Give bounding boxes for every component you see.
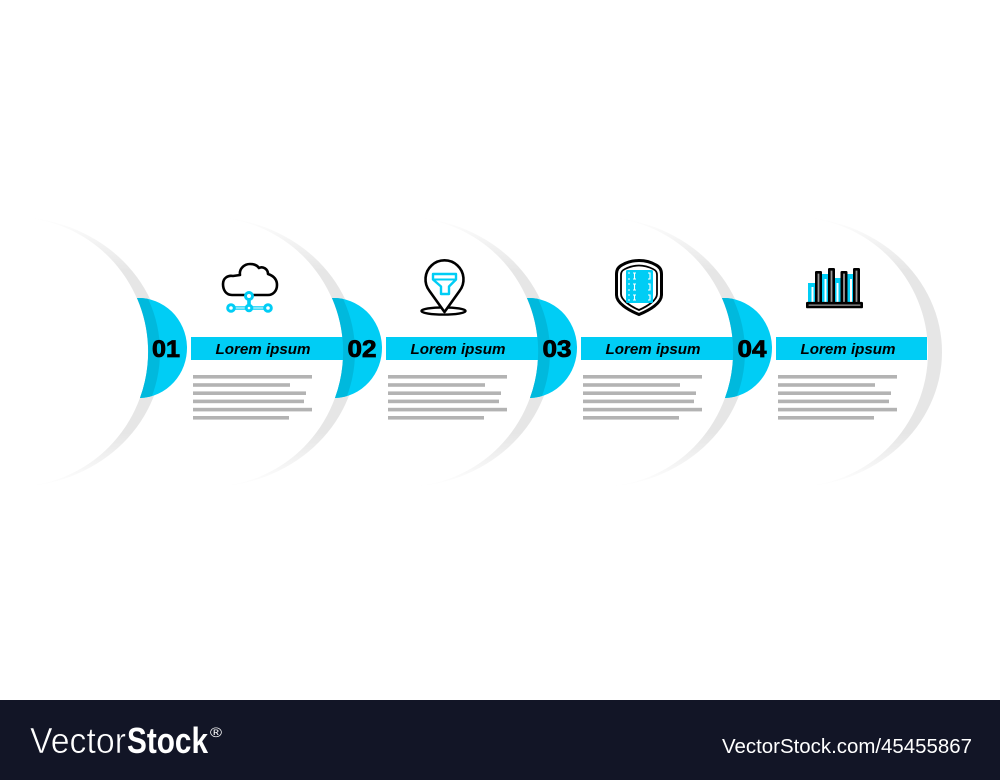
- number badge 02: [332, 298, 382, 398]
- number badge 01: 01: [152, 336, 180, 363]
- footer bar: [0, 700, 1000, 780]
- step 1 text lines: [193, 375, 312, 420]
- step 4 header bar: Lorem ipsum: [800, 341, 896, 358]
- step 3 header bar: [581, 337, 736, 360]
- step 1 header bar: Lorem ipsum: [216, 341, 310, 358]
- number badge 04: 04: [738, 336, 767, 363]
- crescent panel 4: [463, 217, 747, 487]
- step 2 text lines: [388, 375, 507, 420]
- crescent panel 5: [658, 217, 942, 487]
- number badge 03: 03: [542, 336, 572, 363]
- logo: VectorStock: ®: [210, 724, 223, 740]
- step 3 header bar: Lorem ipsum: [606, 341, 700, 358]
- step 1 header bar: [191, 337, 346, 360]
- crescent panel 1: [0, 217, 162, 487]
- icon: shield with server: [616, 260, 662, 314]
- crescent panel 2: [73, 217, 357, 487]
- icon: bar chart: [807, 269, 862, 307]
- icon: map pin with funnel: [422, 260, 466, 315]
- number badge 01: [137, 298, 187, 398]
- footer image reference: VectorStock.com/45455867: [722, 736, 972, 758]
- number badge 04: [722, 298, 772, 398]
- step 3 text lines: [583, 375, 702, 420]
- step 4 header bar: [776, 337, 927, 360]
- step 4 text lines: [778, 375, 897, 420]
- crescent panel 3: [268, 217, 552, 487]
- icon: cloud network: [223, 264, 277, 311]
- logo: VectorStock: [30, 720, 223, 761]
- number badge 03: [527, 298, 577, 398]
- step 2 header bar: [386, 337, 541, 360]
- step 2 header bar: Lorem ipsum: [410, 341, 506, 358]
- number badge 02: 02: [348, 336, 376, 363]
- logo: VectorStock: Stock: [127, 720, 209, 761]
- logo: VectorStock: Vector: [30, 720, 126, 761]
